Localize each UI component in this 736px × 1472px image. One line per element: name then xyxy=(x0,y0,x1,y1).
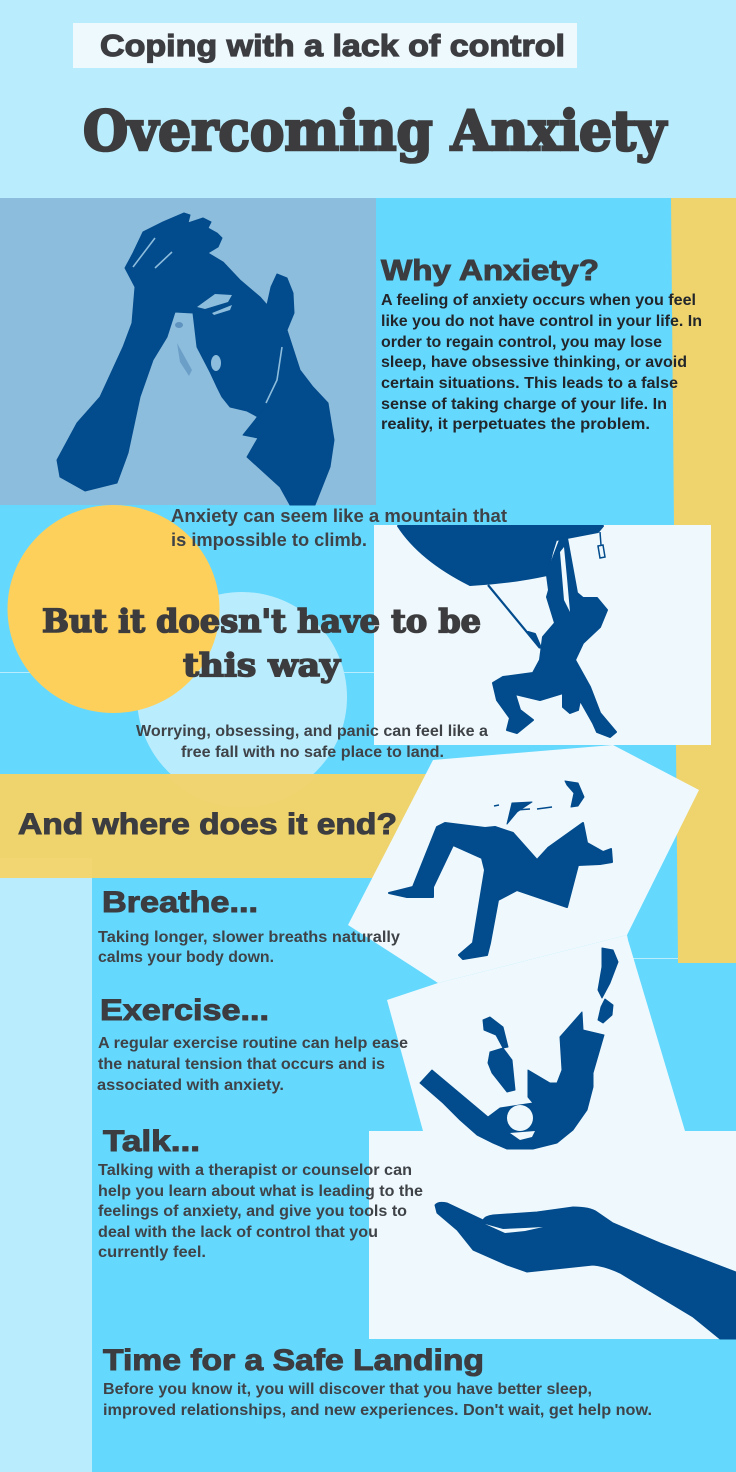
heading: exercise: Exercise... xyxy=(100,994,269,1027)
section: why anxiety xyxy=(381,255,702,433)
text: safe landing body: Before you know it, you will discover that you have better sleep, xyxy=(103,1381,592,1398)
text: why anxiety body: like you do not have control in your life. In xyxy=(381,313,702,330)
text: why anxiety body: sense of taking charge of your life. In xyxy=(381,396,667,413)
icon: yellow circle xyxy=(8,505,220,713)
panel: pale circle xyxy=(137,592,347,802)
text: why anxiety body: order to regain control, you may lose xyxy=(381,334,662,351)
text: why anxiety body: sleep, have obsessive thinking, or avoid xyxy=(381,354,687,371)
section: breathe xyxy=(98,886,400,966)
panel: right yellow stripe xyxy=(671,198,736,963)
panel: subtitle box xyxy=(73,23,577,68)
heading: but it doesn't have to be this way: But it doesn't have to be xyxy=(42,602,481,640)
text: talk body: Talking with a therapist or counselor can xyxy=(98,1162,412,1179)
panel: falling man image xyxy=(348,745,699,983)
section: exercise xyxy=(97,994,408,1094)
text: why anxiety body: certain situations. This leads to a false xyxy=(381,375,678,392)
panel: climber image xyxy=(374,525,711,745)
text: free fall caption xyxy=(136,723,488,761)
text: talk body: deal with the lack of control that you xyxy=(98,1224,378,1241)
text: exercise body xyxy=(97,1035,408,1094)
subtitle: Coping with a lack of control xyxy=(100,28,565,63)
heading: talk: Talk... xyxy=(103,1125,200,1158)
section: safe landing xyxy=(103,1344,652,1419)
text: why anxiety body xyxy=(381,292,702,433)
text: talk body: feelings of anxiety, and give you tools to xyxy=(98,1203,407,1220)
heading: and where does it end: And where does it end? xyxy=(18,808,397,841)
title: Overcoming Anxiety xyxy=(83,98,668,163)
panel: bottom-left pale strip xyxy=(0,878,92,1472)
heading: but it doesn't have to be this way: this way xyxy=(183,646,342,684)
text: talk body: currently feel. xyxy=(98,1244,206,1261)
heading: breathe: Breathe... xyxy=(102,886,258,919)
icon: man holding his head xyxy=(57,213,334,505)
text: breathe body: calms your body down. xyxy=(98,949,274,966)
icon: open hand silhouette xyxy=(435,1202,736,1339)
text: safe landing body xyxy=(103,1381,652,1419)
text: why anxiety body: A feeling of anxiety occurs when you feel xyxy=(381,292,696,309)
text: mountain caption xyxy=(171,506,507,550)
text: safe landing body: improved relationships, and new experiences. Don't wait, get help now. xyxy=(103,1402,652,1419)
heading: why anxiety: Why Anxiety? xyxy=(381,255,599,287)
text: exercise body: A regular exercise routine can help ease xyxy=(98,1035,408,1052)
icon: climber silhouette xyxy=(398,526,616,737)
heading: but it doesn't have to be this way xyxy=(42,602,481,684)
text: breathe body xyxy=(98,929,400,966)
text: breathe body: Taking longer, slower breaths naturally xyxy=(98,929,400,946)
text: talk body: help you learn about what is leading to the xyxy=(98,1183,423,1200)
section: talk xyxy=(98,1125,423,1261)
icon: upside-down figure silhouette xyxy=(420,948,618,1149)
text: exercise body: the natural tension that occurs and is xyxy=(98,1056,385,1073)
panel: yellow band xyxy=(0,774,428,878)
panel: hand image xyxy=(369,1131,736,1339)
text: mountain caption: is impossible to climb. xyxy=(171,530,367,550)
heading: time for a safe landing: Time for a Safe Landing xyxy=(103,1344,484,1377)
panel: stressed man photo xyxy=(0,198,376,505)
text: free fall caption: free fall with no safe place to land. xyxy=(181,744,444,761)
panel: upside-down figure image xyxy=(387,935,685,1131)
text: talk body xyxy=(98,1162,423,1261)
text: exercise body: associated with anxiety. xyxy=(97,1077,284,1094)
text: why anxiety body: reality, it perpetuates the problem. xyxy=(381,416,650,433)
icon: falling man silhouette xyxy=(389,781,612,959)
text: mountain caption: Anxiety can seem like a mountain that xyxy=(171,506,507,526)
text: free fall caption: Worrying, obsessing, and panic can feel like a xyxy=(136,723,488,740)
